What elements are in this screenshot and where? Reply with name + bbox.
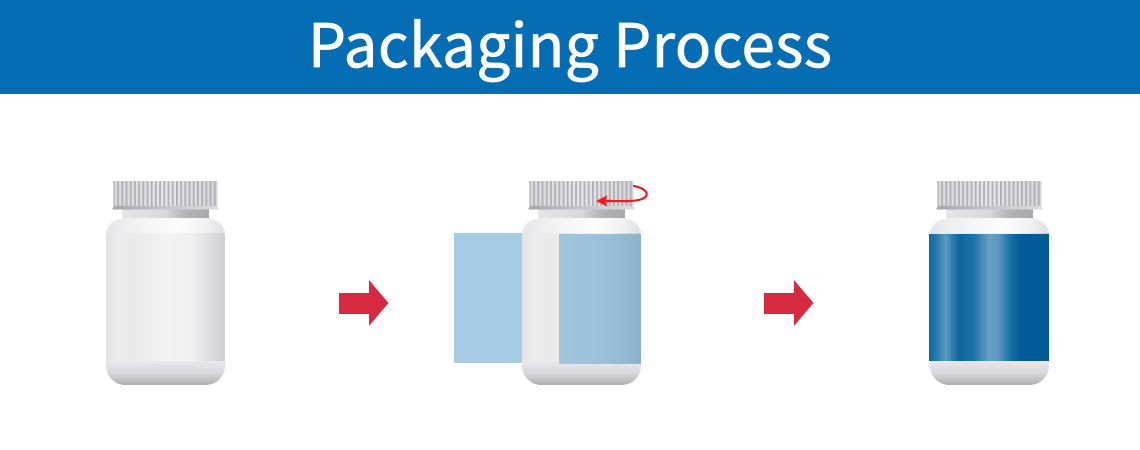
title banner [0,0,1140,94]
bottle 2: label being applied [454,181,647,385]
rotation arrow [596,186,647,206]
finished blue label [929,234,1049,361]
bottle 3: labelled [929,181,1049,385]
arrow 1 [339,280,388,326]
bottle 1: unlabelled [106,181,225,385]
arrow 2 [764,280,814,326]
label wrapped on bottle [559,234,641,364]
flat label sheet [454,233,522,363]
title: Packaging Process [308,0,832,85]
